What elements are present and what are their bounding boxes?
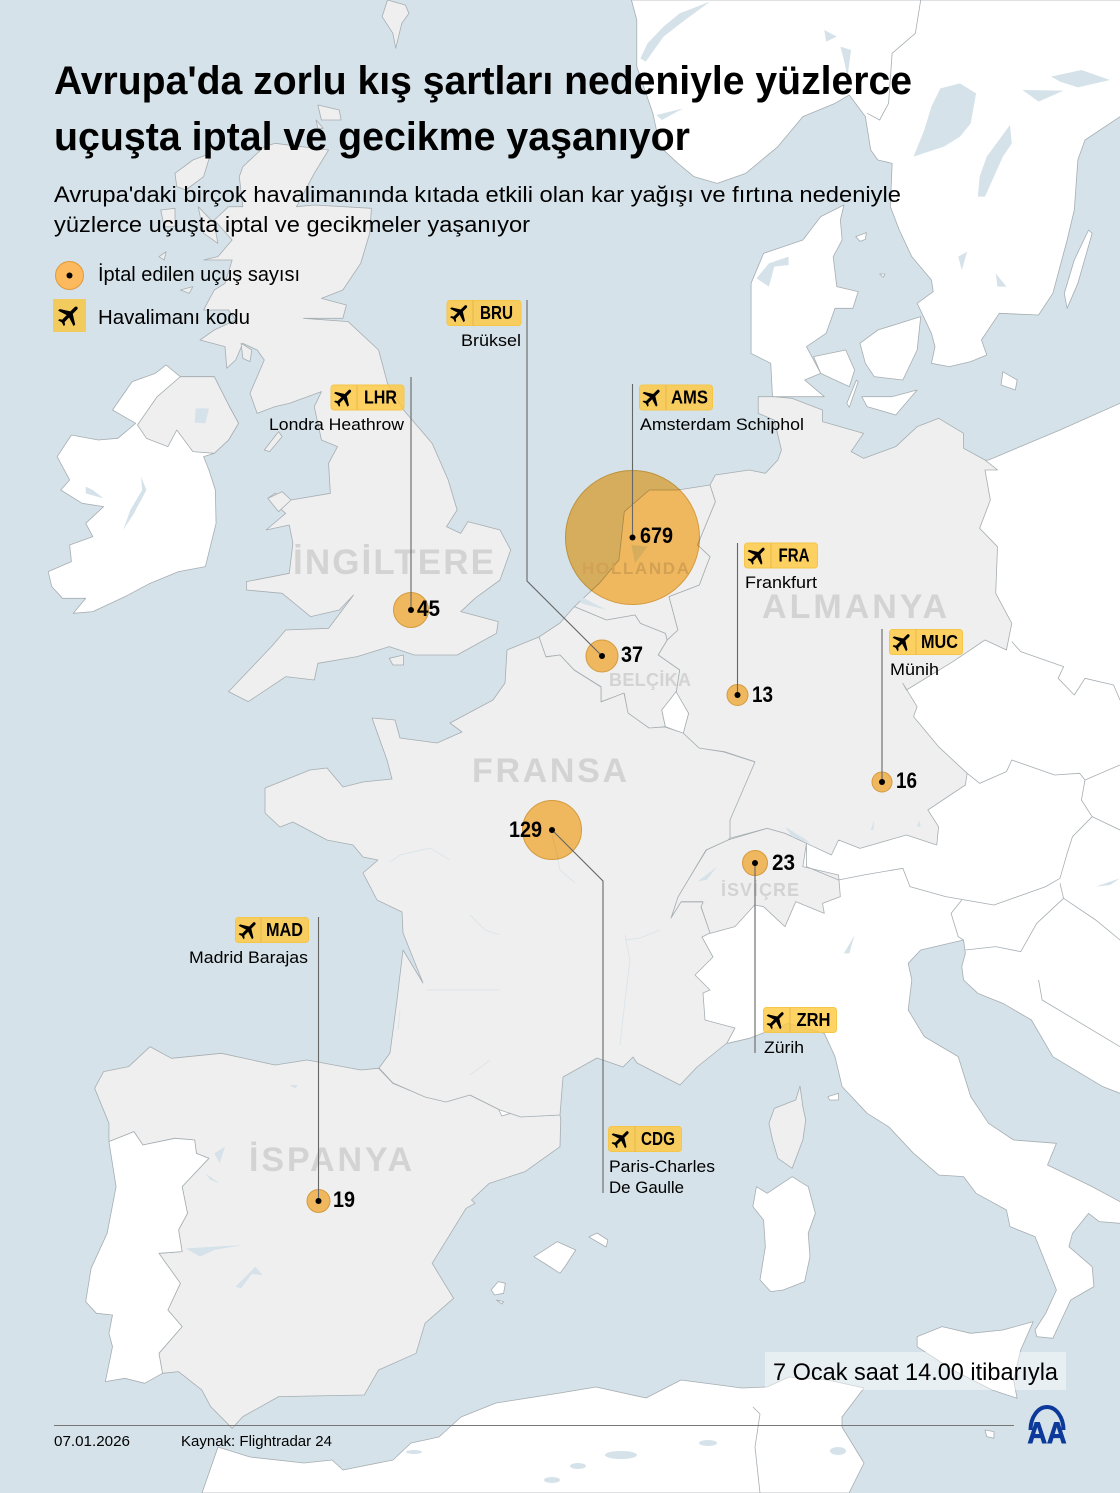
value: 45: 45 xyxy=(417,596,440,621)
airport tag: BRU: Brüksel xyxy=(461,331,521,350)
map: Norway and Sweden xyxy=(631,0,1120,367)
airport tag: AMS: AMS xyxy=(671,386,708,408)
map: Denmark xyxy=(751,205,858,397)
airport tag: LHR xyxy=(269,383,405,434)
map: Sicily xyxy=(917,1322,1033,1398)
map: north Africa xyxy=(202,1377,864,1493)
map: Ireland xyxy=(48,365,239,613)
map: Corsica xyxy=(769,1086,806,1168)
map: Great Britain xyxy=(200,143,511,702)
airport tag: BRU: BRU xyxy=(480,302,513,323)
map: Andorra xyxy=(498,1105,511,1116)
value: 37: 37 xyxy=(621,642,643,667)
airport tag: BRU xyxy=(446,299,521,350)
airport tag: ZRH: Zürih xyxy=(764,1038,804,1057)
map: Spain xyxy=(95,1047,561,1428)
bubble: Paris xyxy=(522,800,582,860)
airport tag: MUC xyxy=(888,628,962,679)
value: 16: 16 xyxy=(896,768,917,793)
airport tag: CDG xyxy=(607,1125,715,1197)
subtitle: Avrupa'daki birçok havalimanında kıtada etkili olan kar yağışı ve fırtına nedeniyle xyxy=(54,182,901,207)
map: central Europe base xyxy=(539,0,1120,1438)
map: Germany xyxy=(658,397,1012,855)
airport tag: LHR: LHR xyxy=(364,386,397,408)
airport tag: MAD: MAD xyxy=(266,919,303,940)
airport tag: ZRH xyxy=(762,1006,836,1057)
map: mainland Europe xyxy=(667,403,1120,1338)
map: Balearic islands xyxy=(491,1233,608,1304)
value: 13: 13 xyxy=(752,682,773,707)
value: 679: 679 xyxy=(640,523,673,548)
title: Avrupa'da zorlu kış şartları nedeniyle yüzlerce xyxy=(54,59,912,103)
map: Scottish islands xyxy=(159,0,409,665)
map: France xyxy=(265,637,755,1117)
map: central European borders xyxy=(806,0,1120,1047)
title: uçuşta iptal ve gecikme yaşanıyor xyxy=(54,115,690,159)
legend: airport code xyxy=(53,299,250,332)
airport tag: ZRH: ZRH xyxy=(796,1009,830,1030)
country label: Almanya: ALMANYA xyxy=(762,588,947,626)
airport tag: MAD xyxy=(189,916,308,967)
country label: Fransa: FRANSA xyxy=(472,752,627,790)
bubble: Amsterdam xyxy=(566,470,700,604)
map: Sardinia xyxy=(753,1177,815,1292)
map: Iberian and Irish lakes xyxy=(86,408,298,1288)
value: 23: 23 xyxy=(772,850,795,875)
airport tag: MUC: MUC xyxy=(921,631,958,652)
bubble: Madrid xyxy=(307,1190,330,1212)
map: Portugal xyxy=(86,1132,209,1383)
map: north Africa borders xyxy=(753,1407,760,1493)
legend: cancelled flights: İptal edilen uçuş sayısı xyxy=(98,263,300,286)
airport tag: MUC: Münih xyxy=(890,660,939,679)
airport tag: FRA: FRA xyxy=(778,544,810,566)
footer source: Kaynak: Flightradar 24 xyxy=(181,1434,332,1450)
bubble: London xyxy=(394,592,428,628)
subtitle xyxy=(54,182,901,237)
title xyxy=(54,59,912,159)
airport tag: MAD: Madrid Barajas xyxy=(189,948,308,967)
map: north Africa lakes xyxy=(406,1440,846,1483)
map: Belgium xyxy=(539,607,680,728)
bubble: Frankfurt xyxy=(727,684,748,706)
country label: İngiltere: İNGİLTERE xyxy=(293,543,494,582)
map: Scandinavian and alpine lakes xyxy=(578,2,1120,953)
map: Northern Ireland xyxy=(137,377,239,453)
airport points xyxy=(316,534,885,1204)
airport tag: FRA xyxy=(743,541,818,592)
map: Netherlands xyxy=(574,485,715,640)
footer line xyxy=(54,1424,1014,1426)
airport tag: AMS xyxy=(638,383,804,434)
footer date: 07.01.2026 xyxy=(54,1434,130,1450)
map: western isles and Iberia xyxy=(48,0,608,1428)
map: Danish and Baltic islands xyxy=(814,230,1092,415)
value: 129: 129 xyxy=(509,817,542,842)
airport tag: CDG: CDG xyxy=(641,1128,675,1149)
country label: Belçika: BELÇİKA xyxy=(609,670,691,690)
value: 19: 19 xyxy=(333,1187,355,1212)
time note: 7 Ocak saat 14.00 itibarıyla xyxy=(773,1359,1059,1386)
subtitle: yüzlerce uçuşta iptal ve gecikmeler yaşanıyor xyxy=(54,212,530,237)
bubble: Munich xyxy=(872,772,892,792)
AA logo: AA xyxy=(1028,1417,1066,1450)
airport tag: CDG: De Gaulle xyxy=(609,1178,684,1197)
airport tag: LHR: Londra Heathrow xyxy=(269,415,405,434)
country label: Hollanda: HOLLANDA xyxy=(582,559,689,578)
bubble: Zurich xyxy=(742,850,768,876)
bubble: Brussels xyxy=(586,640,618,672)
country label: İsviçre: İSVİÇRE xyxy=(721,880,799,900)
map: Luxembourg xyxy=(662,692,689,733)
country label: İspanya: İSPANYA xyxy=(249,1141,412,1179)
airport tag: AMS: Amsterdam Schiphol xyxy=(640,415,804,434)
airport tag: FRA: Frankfurt xyxy=(745,573,817,592)
map: Elba and small islands xyxy=(828,1093,994,1438)
airport tag: CDG: Paris-Charles xyxy=(609,1157,715,1176)
time note xyxy=(765,1352,1066,1390)
map: French rivers and lakes xyxy=(390,835,660,1075)
leader lines xyxy=(318,300,882,1201)
map: Switzerland xyxy=(671,828,840,933)
legend: airport code: Havalimanı kodu xyxy=(98,307,250,329)
legend: cancelled flights xyxy=(56,262,300,290)
